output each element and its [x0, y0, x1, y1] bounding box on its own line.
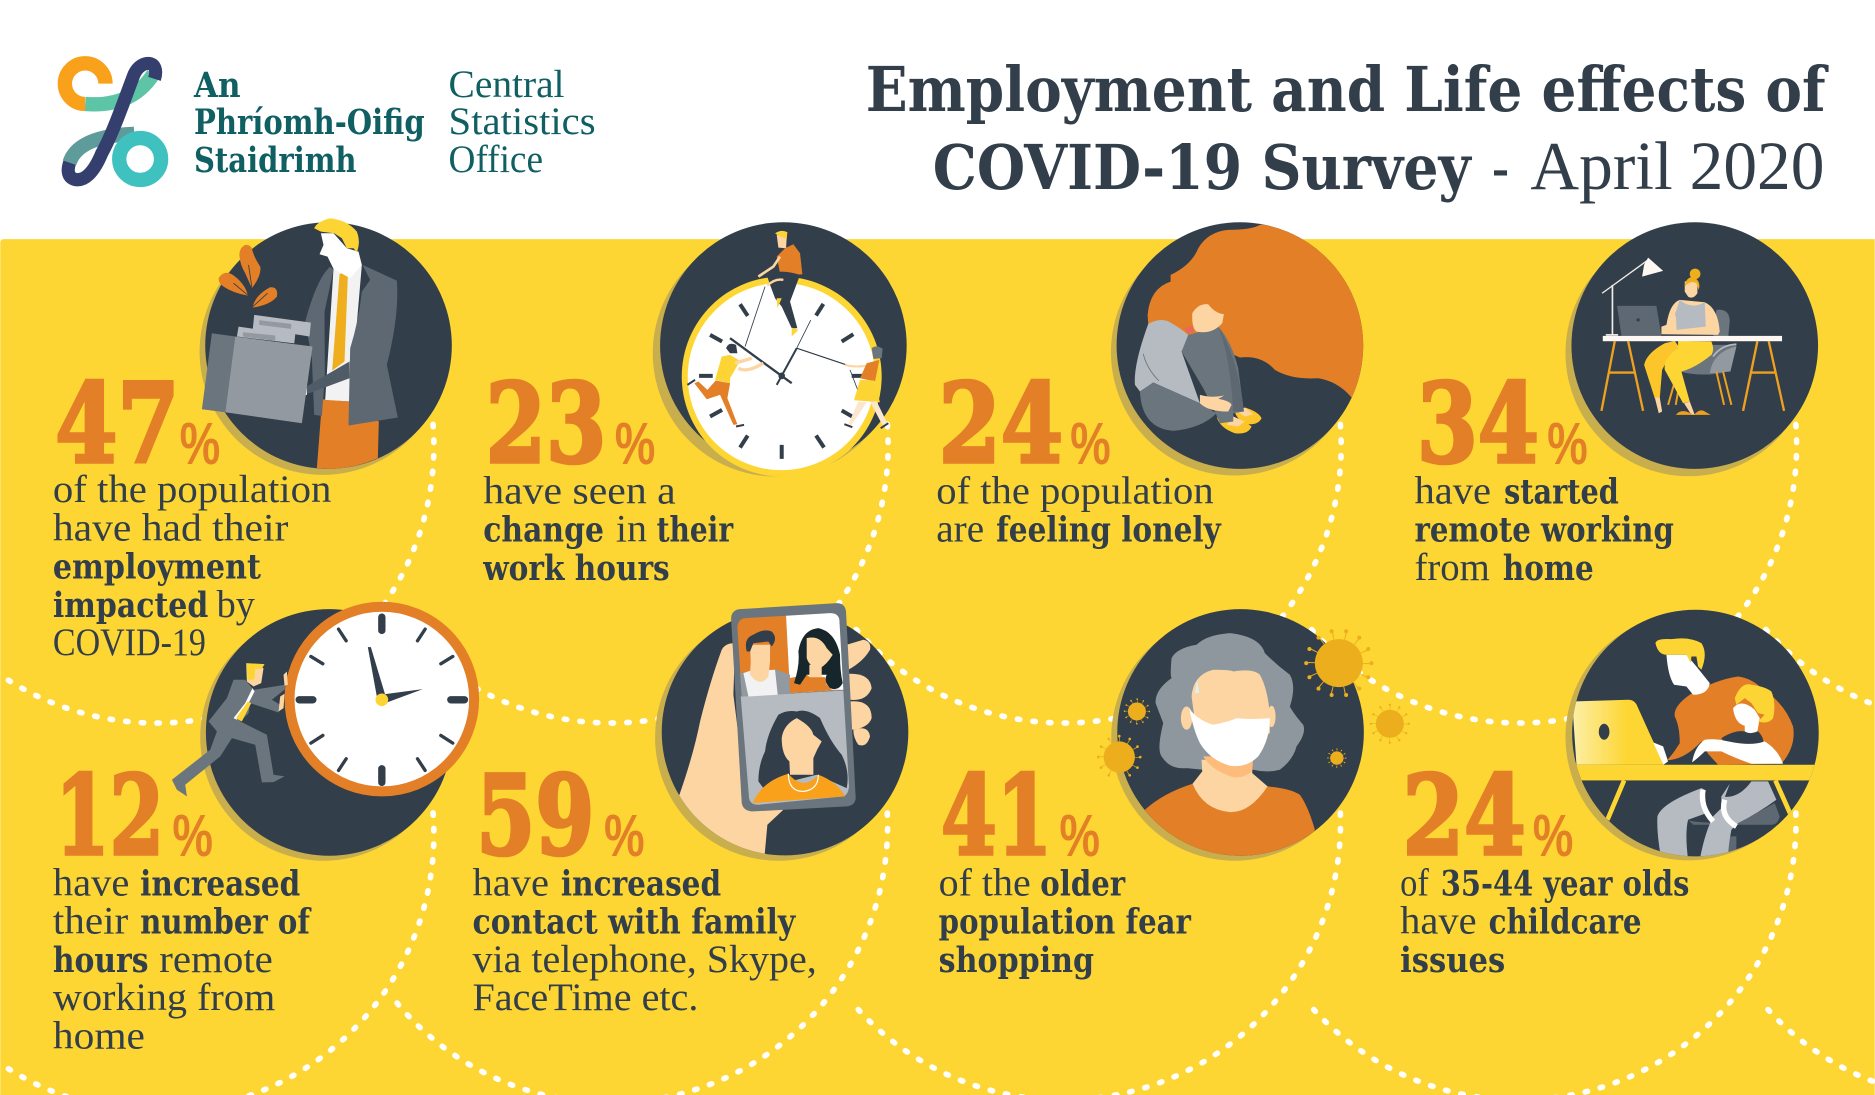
- stat: 41%: shopping: [939, 940, 1094, 981]
- stat: 59%: [472, 751, 817, 1019]
- stat: 12%: number of: [140, 902, 312, 943]
- logo mark: [65, 63, 161, 180]
- stat: 41%: of the: [939, 860, 1031, 904]
- stat: 24% lonely: feeling lonely: [996, 510, 1222, 551]
- stat: 59%: %: [604, 802, 645, 869]
- illustration: older woman with mask and viruses: [1098, 609, 1409, 863]
- stat: 34%: 34: [1417, 359, 1539, 488]
- logo text: Irish: Staidrimh: [194, 140, 357, 181]
- logo text: English: Office: [449, 137, 543, 181]
- stat: 12%: have: [53, 860, 129, 904]
- stat: 41%: 41: [941, 751, 1052, 880]
- illustration: man pushing clock: [172, 607, 474, 861]
- stat: 47%: by: [217, 582, 255, 626]
- stat: 12%: remote: [159, 937, 273, 981]
- stat: 41%: older: [1040, 863, 1126, 904]
- illustration: remote worker at desk: [1565, 222, 1818, 476]
- stat: 23%: 23: [486, 359, 606, 488]
- stat: 34%: %: [1547, 410, 1588, 477]
- stat: 23%: change: [483, 510, 604, 551]
- stat: 34%: home: [1503, 548, 1594, 589]
- stat: 12%: increased: [140, 863, 300, 904]
- stat: 23%: their: [657, 510, 734, 551]
- stat: 24% lonely: 24: [939, 359, 1063, 488]
- yellow background panel: [0, 239, 1875, 1095]
- stat: 24% childcare: of: [1400, 860, 1430, 904]
- stat: 24% lonely: of the population: [936, 468, 1214, 512]
- stat: 23%: have seen a: [483, 468, 676, 512]
- stat: 12%: [53, 751, 312, 1057]
- stat: 24% childcare: childcare: [1489, 902, 1642, 943]
- title: -: [1492, 127, 1509, 204]
- stat: 23%: in: [616, 507, 647, 551]
- virus particles: [1098, 630, 1409, 778]
- illustration: clock with people: [653, 222, 907, 477]
- stat: 59%: increased: [561, 863, 721, 904]
- stat: 47%: employment: [53, 547, 261, 588]
- stat: 12%: hours: [53, 940, 149, 981]
- stat: 59%: via telephone, Skype,: [472, 937, 817, 981]
- stat: 24% childcare: %: [1533, 802, 1573, 869]
- illustration: lonely person with orange hair: [1111, 222, 1372, 476]
- stat: 23%: %: [615, 410, 655, 477]
- stat: 24% lonely: [936, 359, 1222, 551]
- stat: 47%: [53, 359, 332, 664]
- stat: 47%: of the population: [53, 467, 332, 511]
- stat: 59%: contact with family: [472, 902, 796, 943]
- illustration: man carrying box: [200, 218, 452, 475]
- stat: 34%: have: [1414, 468, 1491, 512]
- stat: 24% lonely: %: [1070, 410, 1111, 477]
- stat: 34%: remote working: [1414, 510, 1674, 551]
- stat: 12%: 12: [55, 751, 164, 880]
- stat: 24% childcare: [1400, 751, 1689, 981]
- stat: 47%: have had their: [53, 505, 288, 549]
- stat: 34%: [1414, 359, 1674, 589]
- title: [866, 53, 1829, 204]
- stat: 24% childcare: 24: [1403, 751, 1526, 880]
- logo text: Irish: Phríomh-Oifig: [194, 102, 425, 143]
- stat: 12%: %: [172, 802, 213, 869]
- stat: 41%: population fear: [939, 902, 1192, 943]
- stat: 41%: [939, 751, 1192, 981]
- illustration: parent working with child: [1565, 610, 1825, 860]
- stat: 34%: from: [1414, 545, 1490, 589]
- stat: 24% childcare: 35-44 year olds: [1441, 863, 1689, 904]
- stat: 12%: working from: [53, 975, 276, 1019]
- stat: 34%: started: [1504, 471, 1619, 512]
- illustration: hand holding phone with video call: [655, 603, 908, 861]
- stat: 23%: work hours: [482, 548, 670, 589]
- stat: 47%: 47: [55, 359, 180, 488]
- stat: 59%: FaceTime etc.: [472, 975, 698, 1019]
- stat: 24% childcare: issues: [1400, 940, 1505, 981]
- stat: 41%: %: [1059, 802, 1100, 869]
- stat: 59%: have: [472, 860, 549, 904]
- logo text: English: Central: [449, 62, 565, 106]
- stat: 12%: their: [53, 899, 128, 943]
- stat: 24% childcare: have: [1400, 899, 1477, 943]
- stat: 47%: impacted: [53, 585, 208, 626]
- logo text: English: Statistics: [449, 99, 596, 143]
- stat: 23%: [482, 359, 734, 589]
- stat: 47%: COVID-19: [53, 620, 206, 664]
- stat: 59%: 59: [476, 751, 594, 880]
- stat: 12%: home: [53, 1013, 145, 1057]
- title: April 2020: [1530, 127, 1824, 204]
- stat: 47%: %: [180, 410, 220, 477]
- title: COVID-19 Survey: [933, 131, 1472, 204]
- stat: 24% lonely: are: [936, 507, 984, 551]
- logo text: Irish: An: [193, 65, 241, 106]
- logo text: Irish: [193, 65, 425, 181]
- logo text: English: [449, 62, 596, 181]
